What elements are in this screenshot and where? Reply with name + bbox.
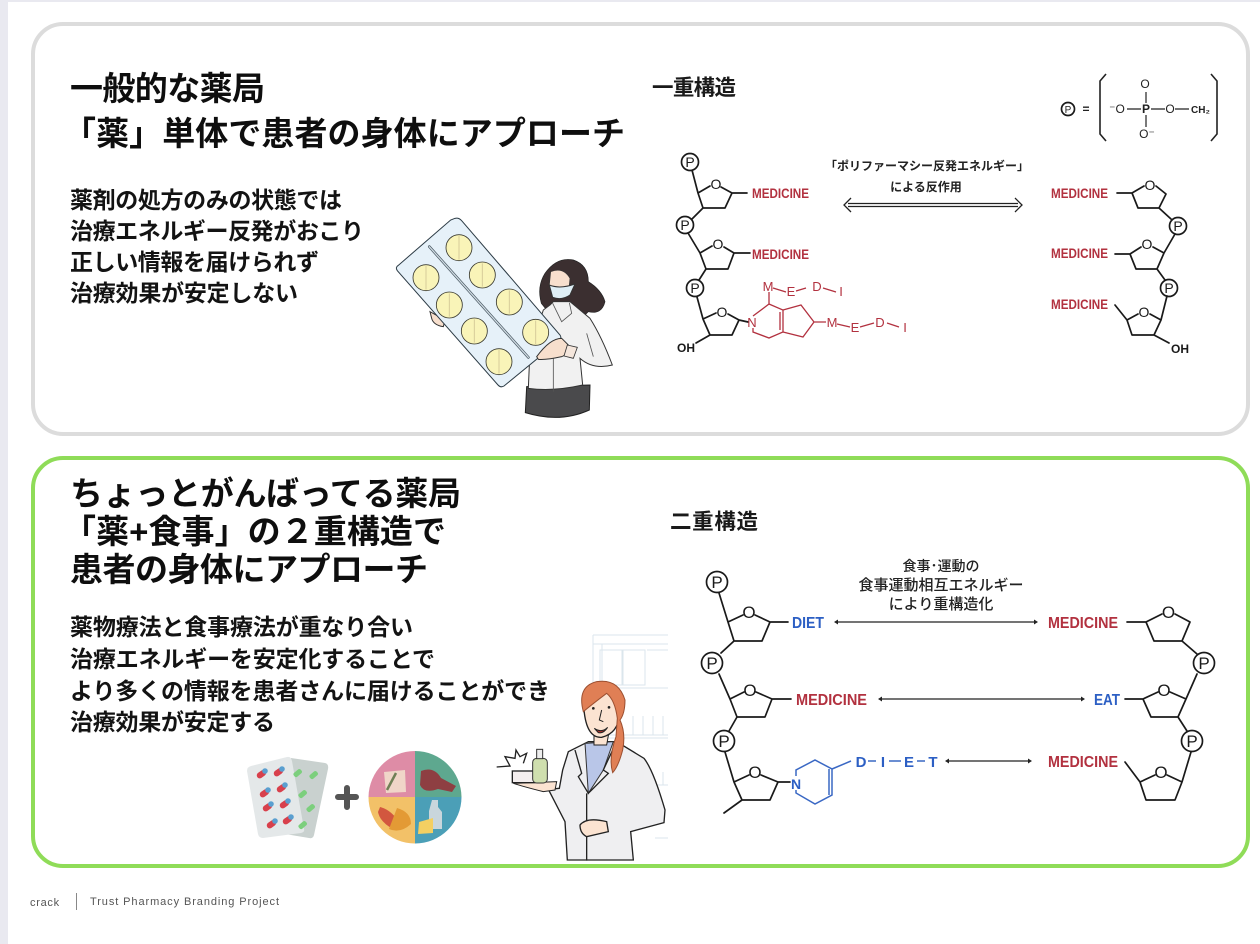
- arrow: diet to medicine: [945, 758, 1032, 764]
- text block: prescription only: 薬剤の処方のみの状態では: [70, 187, 342, 213]
- illustration: shelves in the background: [593, 635, 668, 838]
- illustration: woman holding a large pill sheet: [396, 218, 612, 417]
- diagram: dual left strand: P: [706, 654, 718, 673]
- heading: general pharmacy: 「薬」単体で患者の身体にアプローチ: [63, 115, 625, 152]
- diagram: right strand with medicine: OH: [1171, 342, 1189, 356]
- text block: prescription only: 治療エネルギー反発がおこり: [70, 218, 364, 244]
- diagram: dual left strand: DIET: [792, 615, 824, 632]
- arrow: polypharmacy repulsion energy: [825, 159, 1029, 212]
- diagram: dual left strand: O: [743, 681, 757, 700]
- footer: project credit: [30, 893, 279, 910]
- heading: single structure: 一重構造: [652, 76, 736, 100]
- diagram: right strand with medicine: P: [1173, 218, 1183, 234]
- arrow: diet and exercise energy: [834, 558, 1038, 624]
- diagram: dual right strand: O: [1157, 681, 1171, 700]
- diagram: left strand with medicine: P: [680, 217, 690, 233]
- heading: pharmacy trying harder: 「薬+食事」の２重構造で: [63, 513, 446, 550]
- diagram: left strand with medicine: I: [839, 284, 843, 299]
- diagram: dual left strand: P: [711, 573, 723, 592]
- text block: medication and diet therapy: 薬物療法と食事療法が重なり合い: [70, 614, 413, 640]
- diagram: dual left strand: E: [904, 754, 914, 771]
- arrow: diet and exercise energy: により重構造化: [889, 595, 993, 613]
- diagram: dual left strand: P: [718, 732, 730, 751]
- diagram: left strand with medicine: D: [812, 279, 822, 294]
- diagram: left strand with medicine: E: [851, 320, 860, 335]
- diagram: dual right strand: MEDICINE: [1048, 615, 1118, 632]
- chemical formula: phosphate: O: [1140, 77, 1150, 91]
- diagram: left strand with medicine: O: [713, 236, 724, 252]
- diagram: left strand with medicine: M: [827, 315, 837, 330]
- arrow: diet and exercise energy: 食事運動相互エネルギー: [858, 577, 1024, 594]
- icon: plus sign: [338, 788, 356, 807]
- illustration: pharmacist holding products: [497, 681, 665, 861]
- diagram: dual left strand: D: [856, 754, 867, 771]
- arrow: polypharmacy repulsion energy: 「ポリファーマシー反発エネルギー」: [825, 159, 1029, 173]
- arrow: polypharmacy repulsion energy: による反作用: [890, 179, 962, 194]
- arrow: medicine to eat: [878, 696, 1085, 702]
- chemical formula: phosphate: [1062, 74, 1217, 141]
- heading: pharmacy trying harder: ちょっとがんばってる薬局: [70, 475, 461, 512]
- diagram: dual right strand: O: [1154, 763, 1168, 782]
- diagram: right strand with medicine: O: [1139, 304, 1150, 320]
- diagram: left strand with medicine: OH: [677, 341, 695, 355]
- chemical formula: phosphate: P: [1065, 105, 1072, 116]
- text block: medication and diet therapy: 治療エネルギーを安定化することで: [70, 646, 435, 672]
- diagram: left strand with medicine: MEDICINE: [752, 246, 809, 262]
- diagram: left strand with medicine: M: [763, 279, 773, 294]
- diagram: dual left strand: [702, 572, 938, 813]
- chemical formula: phosphate: O: [1165, 102, 1175, 116]
- diagram: right strand with medicine: O: [1142, 236, 1153, 252]
- diagram: dual right strand: P: [1186, 732, 1198, 751]
- chemical formula: phosphate: CH₂: [1191, 105, 1210, 116]
- diagram: dual left strand: O: [748, 763, 762, 782]
- diagram: right strand with medicine: MEDICINE: [1051, 296, 1108, 312]
- diagram: left strand with medicine: O: [711, 176, 722, 192]
- chemical formula: phosphate: ⁻O: [1109, 102, 1125, 116]
- diagram: left strand with medicine: MEDICINE: [752, 185, 809, 201]
- diagram: dual right strand: EAT: [1094, 692, 1120, 709]
- diagram: dual left strand: N: [791, 776, 801, 792]
- diagram: left strand with medicine: N: [747, 315, 757, 330]
- diagram: right strand with medicine: MEDICINE: [1051, 185, 1108, 201]
- diagram: dual right strand: MEDICINE: [1048, 754, 1118, 771]
- chemical formula: phosphate: =: [1082, 102, 1090, 116]
- diagram: left strand with medicine: O: [717, 304, 728, 320]
- text block: medication and diet therapy: 治療効果が安定する: [70, 709, 275, 735]
- diagram: dual right strand: O: [1162, 603, 1175, 622]
- heading: general pharmacy: [63, 70, 625, 152]
- text block: prescription only: [70, 187, 364, 306]
- text block: prescription only: 治療効果が安定しない: [70, 280, 298, 306]
- diagram: left strand with medicine: P: [690, 280, 700, 296]
- diagram: left strand with medicine: P: [685, 154, 695, 170]
- text block: prescription only: 正しい情報を届けられず: [70, 249, 319, 275]
- diagram: left strand with medicine: D: [875, 315, 885, 330]
- footer: project credit: Trust Pharmacy Branding Project: [90, 896, 279, 908]
- diagram: dual right strand: [1048, 603, 1214, 800]
- icon: food plate: [368, 751, 462, 844]
- diagram: right strand with medicine: MEDICINE: [1051, 245, 1108, 261]
- diagram: left strand with medicine: I: [903, 320, 907, 335]
- diagram: dual right strand: P: [1198, 654, 1210, 673]
- heading: dual structure: 二重構造: [670, 510, 758, 534]
- panel: general pharmacy: [33, 24, 1248, 434]
- heading: pharmacy trying harder: 患者の身体にアプローチ: [70, 551, 428, 588]
- diagram: left strand with medicine: [676, 154, 907, 355]
- footer: project credit: crack: [30, 897, 60, 909]
- heading: general pharmacy: 一般的な薬局: [70, 70, 265, 107]
- chemical formula: phosphate: O⁻: [1139, 127, 1155, 141]
- diagram: right strand with medicine: O: [1145, 177, 1156, 193]
- diagram: dual left strand: MEDICINE: [796, 692, 867, 709]
- diagram: dual left strand: T: [928, 754, 938, 771]
- diagram: dual left strand: O: [742, 603, 756, 622]
- text block: medication and diet therapy: より多くの情報を患者さんに届けることができ: [70, 678, 550, 704]
- icon: medicine blister packs: [247, 757, 328, 838]
- diagram: left strand with medicine: E: [787, 284, 796, 299]
- diagram: dual left strand: I: [881, 754, 885, 771]
- panel: pharmacy with dual structure: [33, 458, 1248, 866]
- diagram: right strand with medicine: [1051, 177, 1189, 356]
- diagram: right strand with medicine: P: [1164, 280, 1174, 296]
- text block: medication and diet therapy: [70, 614, 550, 735]
- arrow: diet and exercise energy: 食事･運動の: [902, 558, 980, 574]
- chemical formula: phosphate: P: [1142, 102, 1150, 116]
- heading: pharmacy trying harder: [63, 475, 461, 588]
